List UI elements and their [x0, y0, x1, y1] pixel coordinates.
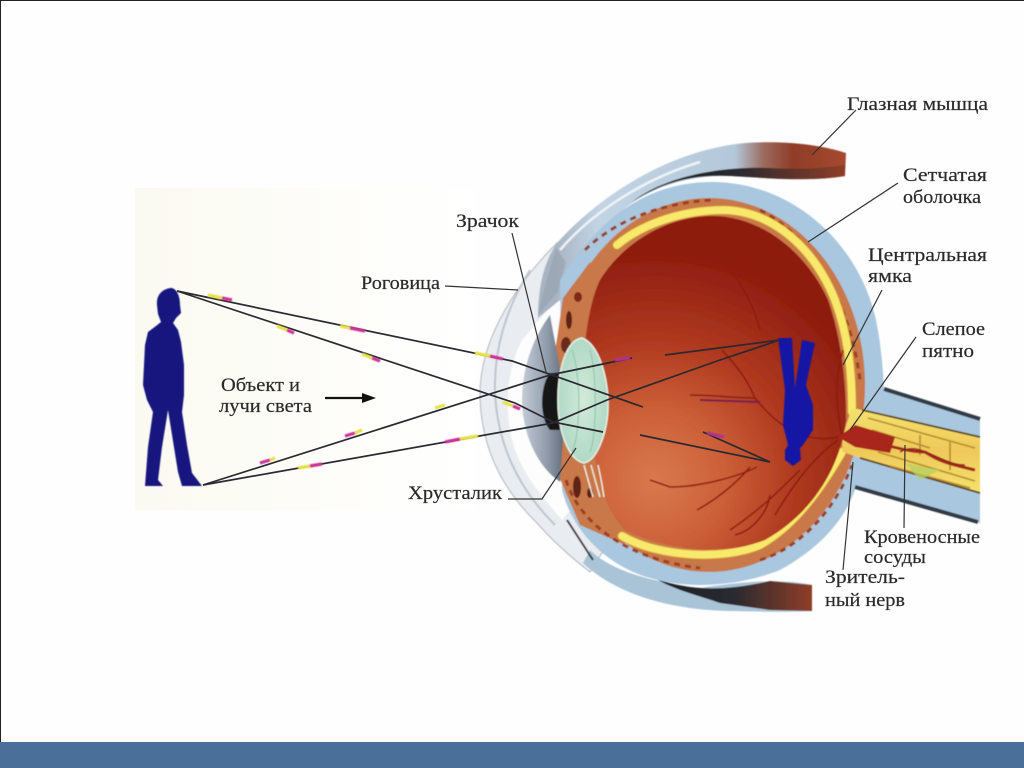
eye cross-section diagram: [480, 142, 980, 612]
rainbow marks on rays: [208, 295, 724, 468]
label: object and light rays: [219, 376, 312, 417]
lens: [558, 338, 608, 463]
label: retina: оболочка: [903, 188, 981, 208]
label: optic nerve: [825, 568, 905, 611]
leader lines: [445, 110, 916, 570]
sclera with nerve sheath: [560, 182, 980, 585]
label: eye muscle: Глазная мышца: [847, 95, 988, 115]
label: cornea: Роговица: [361, 274, 440, 294]
label: retina: Сетчатая: [903, 166, 988, 186]
label: optic nerve: ный нерв: [825, 591, 905, 611]
label: object and light rays: Объект и: [221, 376, 300, 396]
label: blind spot: пятно: [922, 342, 974, 362]
upper eye muscle: [538, 142, 846, 318]
label: fovea: ямка: [868, 267, 912, 287]
ray: head, lower: [177, 291, 770, 462]
label: lens: Хрусталик: [408, 484, 502, 504]
label: blood vessels: Кровеносные: [864, 528, 980, 548]
label: pupil: Зрачок: [456, 212, 519, 232]
label: retina: [903, 166, 988, 208]
cream photo area: [135, 188, 475, 510]
label: object and light rays: лучи света: [219, 397, 312, 417]
choroid ring: [553, 198, 865, 572]
cornea and front of eye: [480, 243, 610, 572]
light rays: [177, 291, 780, 485]
lower eye muscle: [567, 520, 812, 612]
label: blood vessels: [864, 528, 980, 568]
bottom bar: [0, 742, 1024, 768]
label: fovea: [868, 246, 988, 287]
ray: feet, upper: [203, 340, 780, 485]
person figure: [143, 288, 202, 486]
iris: [522, 315, 566, 482]
inverted image on retina: [778, 338, 815, 466]
ray: head, upper: [177, 291, 770, 462]
label: blind spot: Слепое: [922, 320, 985, 340]
label: fovea: Центральная: [868, 246, 988, 266]
ray: feet, lower: [203, 340, 780, 485]
blood vessels: [650, 240, 843, 535]
retina yellow band: [617, 210, 852, 555]
label: blind spot: [922, 320, 985, 362]
optic nerve: [838, 408, 980, 493]
vitreous body: [584, 216, 846, 550]
arrow: light direction: [325, 393, 376, 403]
sheath dark edges: [855, 389, 980, 522]
ciliary fibres: [584, 465, 604, 497]
label: optic nerve: Зритель-: [825, 568, 905, 588]
label: blood vessels: сосуды: [864, 548, 926, 568]
